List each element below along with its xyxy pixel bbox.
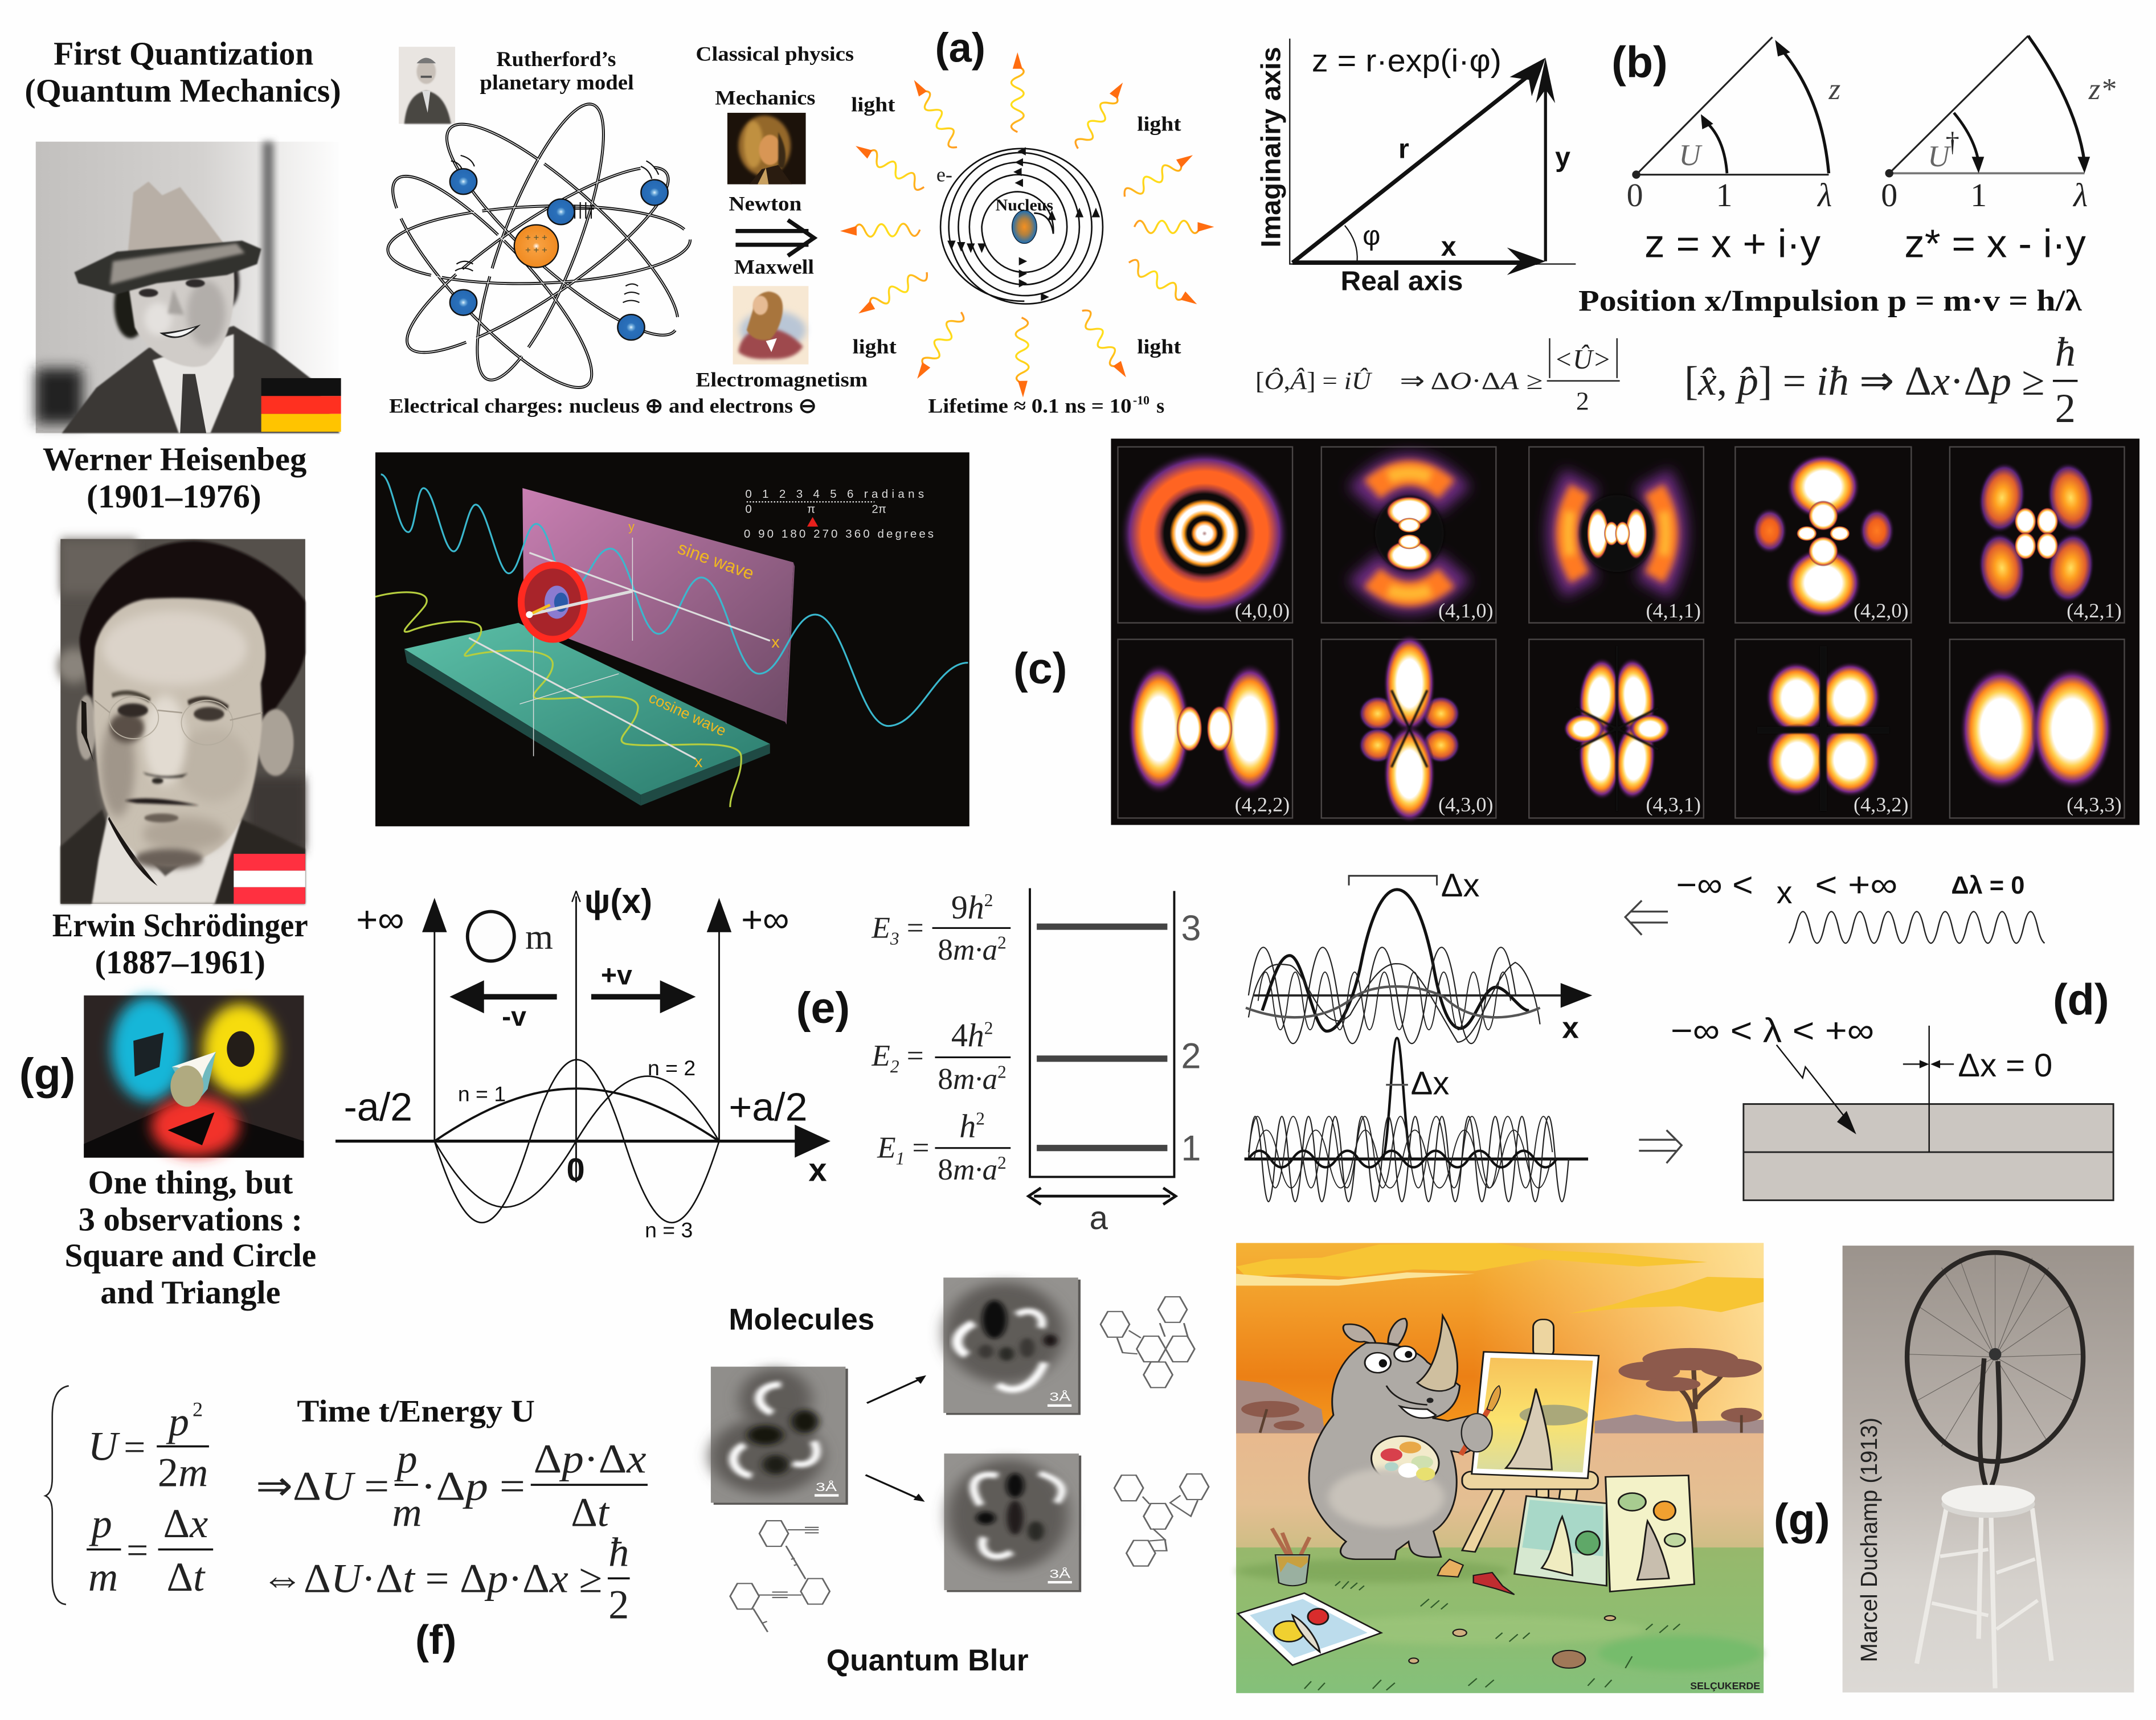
formula: energy levels: E xyxy=(877,1132,896,1165)
image: cone with shadows xyxy=(84,996,304,1158)
hills xyxy=(1236,1380,1325,1434)
radian scale: 0 xyxy=(745,502,752,515)
formula: energy levels: 2 xyxy=(984,890,993,910)
diagram: Rutherford atom: + + + xyxy=(525,244,547,255)
title: First Quantization xyxy=(24,35,341,109)
palette paint xyxy=(1381,1441,1435,1480)
diagram: z conjugate sector: † xyxy=(1946,128,1959,158)
label: (e): (e) xyxy=(796,984,850,1033)
diagram: z conjugate sector: λ xyxy=(2072,177,2088,214)
diagram: z conjugate sector xyxy=(1881,36,2116,214)
caption: lifetime: s xyxy=(1156,394,1164,417)
diagram: Rutherford atom: + + + xyxy=(525,232,547,243)
electrons xyxy=(450,169,668,340)
formula: energy levels: 2 xyxy=(997,1153,1007,1173)
panel: sine and cosine waves: sine wave xyxy=(675,538,756,584)
formula: general uncertainty: ⇒ Δ O ·Δ A ≥ xyxy=(1400,367,1543,395)
chart: complex plane triangle: φ xyxy=(1363,220,1380,251)
label: (d): (d) xyxy=(2053,976,2109,1025)
orbital 4,2,1: (4,2,1) xyxy=(2067,599,2122,622)
formula: z and z* xyxy=(1644,222,2086,266)
formula: time energy uncertainty: ⇒Δ U = xyxy=(256,1463,389,1509)
arrow: right implied xyxy=(1639,1130,1682,1163)
green wave xyxy=(375,592,741,807)
label: (g) left: (g) xyxy=(19,1050,75,1099)
flag: Germany xyxy=(261,378,341,432)
formula: time energy uncertainty: ⇔ΔU·Δt = Δp·Δx ≥ xyxy=(261,1555,602,1601)
plane: sine xyxy=(522,488,793,722)
formula: time energy uncertainty: Time t/Energy U xyxy=(297,1394,535,1429)
formula: time energy uncertainty: p xyxy=(166,1398,189,1444)
label: delta x narrow: Δx xyxy=(1411,1066,1449,1102)
caption: Heisenberg xyxy=(43,441,306,515)
orbital 4,3,3: (4,3,3) xyxy=(2067,793,2122,816)
orbital 4,0,0 xyxy=(1119,449,1290,622)
rhino xyxy=(1309,1316,1491,1559)
diagram: z conjugate sector: z* xyxy=(2088,73,2116,106)
formula: time energy uncertainty: 2 xyxy=(608,1581,629,1627)
wave n=2 xyxy=(435,1076,719,1207)
caption: Heisenberg: (1901–1976) xyxy=(87,478,261,515)
caption: one thing, three observations: and Triangle xyxy=(100,1273,280,1311)
ground xyxy=(1236,1434,1764,1551)
canvas sun xyxy=(1606,1476,1694,1592)
chart: particle in a box wavefunctions xyxy=(336,882,831,1242)
brush xyxy=(1460,1386,1500,1455)
formula: energy levels: 2 xyxy=(976,1109,985,1129)
text: Rutherford's planetary model: Rutherford’s xyxy=(496,48,616,71)
caption: Marcel Duchamp: Marcel Duchamp (1913) xyxy=(1856,1418,1882,1662)
text: Electromagnetism: Electromagnetism xyxy=(696,368,868,391)
formula: infinite x range xyxy=(1676,865,2024,910)
label: (a): (a) xyxy=(935,25,985,71)
AFM: product 2: 3Å xyxy=(1049,1567,1071,1580)
orbital 4,0,0: (4,0,0) xyxy=(1235,599,1290,622)
canvas green xyxy=(1515,1496,1606,1586)
label: (g) right: (g) xyxy=(1774,1495,1830,1544)
orbital 4,1,0: (4,1,0) xyxy=(1438,599,1493,622)
chart: particle in a box wavefunctions: x xyxy=(808,1152,827,1189)
flag: Austria xyxy=(234,854,305,904)
wheel xyxy=(1907,1252,2083,1492)
panel: sine and cosine waves: y xyxy=(628,519,635,534)
diagram: energy well: 1 xyxy=(1181,1128,1201,1168)
orbital 4,3,2: (4,3,2) xyxy=(1854,793,1908,816)
phasor disc xyxy=(521,565,632,640)
diagram: z conjugate sector: U xyxy=(1928,140,1952,173)
formula: general uncertainty: 2 xyxy=(1576,386,1589,415)
velocity arrows: +v xyxy=(601,960,632,990)
diagram: spiralling electron: Nucleus xyxy=(996,196,1053,214)
wave n=3 xyxy=(435,1060,719,1223)
particle m xyxy=(468,912,553,961)
orbital 4,1,1 xyxy=(1566,478,1701,622)
diagram: spiralling electron: e- xyxy=(936,163,952,186)
formula: energy levels: 9h xyxy=(951,889,984,926)
diagram: spiralling electron xyxy=(936,147,1103,304)
radian scale: 0 90 180 270 360 degrees xyxy=(744,527,934,540)
formula: energy levels: = xyxy=(905,1132,929,1165)
diagram: Rutherford atom xyxy=(370,91,701,409)
portrait: Rutherford xyxy=(399,47,455,124)
molecule: product 1 structure xyxy=(1100,1297,1194,1387)
formula: time energy uncertainty: p xyxy=(394,1435,418,1481)
photo: Marcel Duchamp bicycle wheel xyxy=(1843,1246,2134,1693)
orbital 4,3,0 xyxy=(1355,634,1493,824)
orbital 4,1,0 xyxy=(1364,473,1493,622)
chart: wave packet narrow xyxy=(1245,1038,1588,1202)
diagram: slit in plate xyxy=(1744,1026,2113,1200)
heading: Molecules: Molecules xyxy=(729,1303,874,1336)
photo: Werner Heisenberg xyxy=(36,142,341,433)
diagram: z unitary sector: 1 xyxy=(1716,177,1733,214)
formula: time energy uncertainty: U xyxy=(88,1423,120,1469)
images: atomic force microscopy xyxy=(710,1277,1209,1632)
orbital 4,3,3 xyxy=(1959,667,2122,816)
text: Newton: Newton xyxy=(729,192,801,215)
label: delta x wide: Δx xyxy=(1441,867,1479,904)
chart: pure sine wave xyxy=(1789,912,2044,943)
portrait: Newton xyxy=(727,113,806,185)
arrow: implies xyxy=(735,220,814,256)
formula: time energy uncertainty: = xyxy=(126,1529,148,1572)
formula: energy levels: h xyxy=(959,1107,976,1144)
orbital 4,1,1: (4,1,1) xyxy=(1646,599,1701,622)
formula: energy levels: 2 xyxy=(984,1018,993,1038)
formula: time energy uncertainty: ·Δ p = xyxy=(421,1463,525,1509)
diagram: z unitary sector xyxy=(1627,37,1840,214)
radian scale: 0 1 2 3 4 5 6 radians xyxy=(745,488,924,501)
caption: Schrodinger: (1887–1961) xyxy=(95,944,265,981)
diagram: energy well: 3 xyxy=(1181,908,1201,948)
orbital 4,3,1: (4,3,1) xyxy=(1646,793,1701,816)
chart: particle in a box wavefunctions: n = 3 xyxy=(645,1218,693,1242)
diagram: z unitary sector: z xyxy=(1828,73,1840,106)
formula: energy levels: = xyxy=(899,911,924,944)
AFM: precursor: 3Å xyxy=(816,1480,837,1494)
formula: time energy uncertainty: 2m xyxy=(158,1449,208,1496)
orbital 4,3,2 xyxy=(1757,646,1908,816)
formula: general uncertainty: [Ô,Â] = iÛ xyxy=(1255,367,1373,395)
labels: light: light xyxy=(851,93,895,116)
formula: time energy uncertainty: Δt xyxy=(167,1554,206,1600)
orbital 4,2,2: (4,2,2) xyxy=(1235,793,1290,816)
labels: light: light xyxy=(1137,335,1181,358)
main canvas xyxy=(1472,1352,1599,1479)
chart: complex plane triangle: x xyxy=(1441,231,1457,262)
AFM: product 1: 3Å xyxy=(1049,1390,1071,1404)
chart: particle in a box wavefunctions: +∞ xyxy=(356,899,404,940)
text: Rutherford's planetary model xyxy=(480,48,634,95)
title: First Quantization: (Quantum Mechanics) xyxy=(24,72,341,109)
nucleus xyxy=(1012,210,1037,243)
formula: time energy uncertainty: = xyxy=(124,1426,145,1469)
formula: time energy uncertainty xyxy=(46,1386,648,1627)
chart: complex plane triangle: Real axis xyxy=(1341,265,1463,296)
formula: energy levels: 8m·a xyxy=(938,1063,997,1096)
formula: energy levels: 2 xyxy=(997,933,1007,953)
caption: Schrodinger xyxy=(52,907,308,981)
formula: energy levels: 8m·a xyxy=(938,1153,997,1186)
labels: light: light xyxy=(1137,112,1181,135)
chart: particle in a box wavefunctions: n = 1 xyxy=(458,1082,506,1106)
molecule: product 2 structure xyxy=(1114,1474,1209,1566)
panel: sine and cosine waves xyxy=(375,452,969,826)
caption: lifetime: Lifetime ≈ 0.1 ns = 10 xyxy=(928,394,1132,417)
formula: infinite x range: Δλ = 0 xyxy=(1951,872,2024,899)
chart: particle in a box wavefunctions: 0 xyxy=(567,1152,585,1189)
chart: wave packet wide xyxy=(1246,876,1592,1043)
jar of brushes xyxy=(1272,1529,1310,1586)
stool xyxy=(1917,1485,2052,1688)
text: Rutherford's planetary model: planetary model xyxy=(480,71,634,95)
formula: z and z*: z = x + i·y xyxy=(1644,222,1820,266)
label: (f): (f) xyxy=(415,1617,456,1663)
chart: particle in a box wavefunctions: -a/2 xyxy=(343,1084,412,1129)
formula: infinite x range: < +∞ xyxy=(1815,865,1897,904)
radian scale: 2π xyxy=(872,502,886,515)
caption: electrical charges: Electrical charges: nucleus ⊕ and electrons ⊖ xyxy=(389,394,817,417)
cartoon: rhino painter xyxy=(1236,1243,1764,1693)
formula: energy levels: 3 xyxy=(890,928,899,948)
panel: sine and cosine waves: x xyxy=(694,753,703,771)
formula: Heisenberg uncertainty: ħ xyxy=(2055,329,2076,375)
grass tufts xyxy=(1304,1582,1680,1690)
radian scale: π xyxy=(807,502,815,515)
nucleus xyxy=(514,225,558,268)
trees xyxy=(1241,1348,1762,1433)
formula: Heisenberg uncertainty xyxy=(1684,329,2077,431)
formula: energy levels: 8m·a xyxy=(938,933,997,967)
text: Maxwell: Maxwell xyxy=(734,255,814,278)
canvas on ground xyxy=(1238,1593,1381,1665)
formula: general uncertainty xyxy=(1255,338,1620,415)
caption: one thing, three observations: 3 observations : xyxy=(79,1201,302,1238)
orbital 4,3,0: (4,3,0) xyxy=(1438,793,1493,816)
arrow: left implied xyxy=(1625,900,1668,935)
labels: light xyxy=(851,93,1181,358)
particle m: m xyxy=(525,917,553,957)
diagram: z unitary sector: U xyxy=(1679,139,1703,172)
orbital 4,2,2 xyxy=(1127,663,1290,816)
velocity arrows xyxy=(449,960,696,1032)
chart: complex plane triangle: r xyxy=(1398,134,1409,165)
label: (b): (b) xyxy=(1611,38,1668,87)
formula: time energy uncertainty: m xyxy=(392,1489,422,1535)
panel: hydrogen orbitals xyxy=(1111,439,2139,825)
caption: one thing, three observations xyxy=(64,1164,316,1311)
orbital 4,2,1 xyxy=(1974,459,2122,622)
chart: particle in a box wavefunctions: ψ(x) xyxy=(584,882,652,920)
diagram: slit in plate: Δx = 0 xyxy=(1958,1047,2052,1084)
cartoon: rhino painter: SELÇUKERDE xyxy=(1690,1681,1760,1692)
chart: complex plane triangle xyxy=(1255,39,1576,296)
panel: sine and cosine waves: x xyxy=(771,633,780,652)
text: Mechanics: Mechanics xyxy=(715,87,815,109)
panel: sine and cosine waves: cosine wave xyxy=(646,689,729,739)
orbital 4,2,0 xyxy=(1752,454,1908,622)
formula: time energy uncertainty: p xyxy=(89,1500,112,1546)
formula: Heisenberg uncertainty: [x̂, p̂] = iħ ⇒ Δx·Δp ≥ xyxy=(1684,358,2044,404)
formula: infinite wavelength range: −∞ < λ < +∞ xyxy=(1671,1011,1874,1050)
labels: light: light xyxy=(853,335,897,358)
formula: energy levels: 2 xyxy=(890,1056,899,1076)
chart: particle in a box wavefunctions: n = 2 xyxy=(648,1056,696,1080)
caption: one thing, three observations: Square and Circle xyxy=(64,1236,316,1273)
diagram: energy well xyxy=(1029,888,1201,1236)
diagram: energy well: a xyxy=(1090,1200,1108,1236)
orbital 4,3,1 xyxy=(1564,646,1701,816)
label: x axis: x xyxy=(1562,1011,1579,1045)
AFM: precursor xyxy=(710,1367,848,1505)
diagram: z unitary sector: λ xyxy=(1817,177,1832,214)
diagram: z unitary sector: 0 xyxy=(1627,177,1643,214)
chart: complex plane triangle: Imaginairy axis xyxy=(1255,47,1286,248)
formula: time energy uncertainty: m xyxy=(88,1554,118,1600)
AFM: product 2 xyxy=(944,1453,1081,1592)
formula: time energy uncertainty: ħ xyxy=(608,1529,629,1575)
orbital 4,2,0: (4,2,0) xyxy=(1854,599,1908,622)
formula: time energy uncertainty: 2 xyxy=(193,1398,203,1420)
formula: z and z*: z* = x - i·y xyxy=(1904,222,2086,266)
clouds xyxy=(1236,1243,1764,1313)
formula: energy levels: 4h xyxy=(951,1017,984,1054)
diagram: z conjugate sector: 0 xyxy=(1881,177,1897,214)
diagram: energy well: 2 xyxy=(1181,1037,1201,1076)
chart: particle in a box wavefunctions: +∞ xyxy=(741,899,789,940)
formula: energy levels xyxy=(871,889,1011,1186)
arrows: reaction xyxy=(866,1375,926,1502)
formula: infinite x range: −∞ < xyxy=(1676,865,1753,904)
portrait: Maxwell xyxy=(733,286,808,365)
diagram: z conjugate sector: 1 xyxy=(1970,177,1987,214)
blue wave xyxy=(381,474,968,726)
formula: energy levels: 2 xyxy=(997,1062,1007,1082)
formula: energy levels: = xyxy=(899,1039,924,1072)
text: position and impulsion: Position x/Impulsion p = m·v = h/λ xyxy=(1578,285,2083,318)
orbits xyxy=(370,91,701,409)
wave n=1 xyxy=(435,1088,719,1141)
caption: Heisenberg: Werner Heisenbeg xyxy=(43,441,306,478)
label: (c): (c) xyxy=(1013,644,1067,693)
paint tubes and stones xyxy=(1409,1559,1615,1668)
chart: particle in a box wavefunctions: +a/2 xyxy=(729,1084,808,1129)
easel xyxy=(1462,1320,1598,1552)
formula: time energy uncertainty: Δx xyxy=(163,1500,208,1546)
light rays xyxy=(840,52,1214,398)
caption: lifetime: -10 xyxy=(1133,394,1149,407)
radian scale xyxy=(744,488,934,540)
chart: complex plane triangle: y xyxy=(1555,142,1570,173)
caption: one thing, three observations: One thing, but xyxy=(88,1164,293,1201)
AFM: product 1 xyxy=(943,1277,1081,1415)
formula: time energy uncertainty: Δt xyxy=(571,1489,610,1535)
formula: energy levels: E xyxy=(872,1039,890,1072)
photo: Erwin Schrodinger xyxy=(57,539,305,904)
plane: cosine xyxy=(404,623,770,806)
heading: Quantum Blur: Quantum Blur xyxy=(827,1644,1029,1677)
velocity arrows: -v xyxy=(502,1001,526,1032)
text: Classical physics: Classical physics xyxy=(696,42,854,65)
formula: energy levels: 1 xyxy=(896,1149,905,1169)
caption: Schrodinger: Erwin Schrödinger xyxy=(52,907,308,944)
molecule: precursor structure xyxy=(730,1521,830,1632)
formula: infinite x range: x xyxy=(1777,875,1793,910)
formula: time energy uncertainty: Δp·Δx xyxy=(534,1435,647,1481)
formula: Heisenberg uncertainty: 2 xyxy=(2055,385,2076,431)
title: First Quantization: First Quantization xyxy=(54,35,313,72)
chart: complex plane triangle: z = r·exp(i·φ) xyxy=(1312,43,1502,79)
formula: general uncertainty: <Û> xyxy=(1554,344,1611,375)
formula: energy levels: E xyxy=(872,911,890,944)
